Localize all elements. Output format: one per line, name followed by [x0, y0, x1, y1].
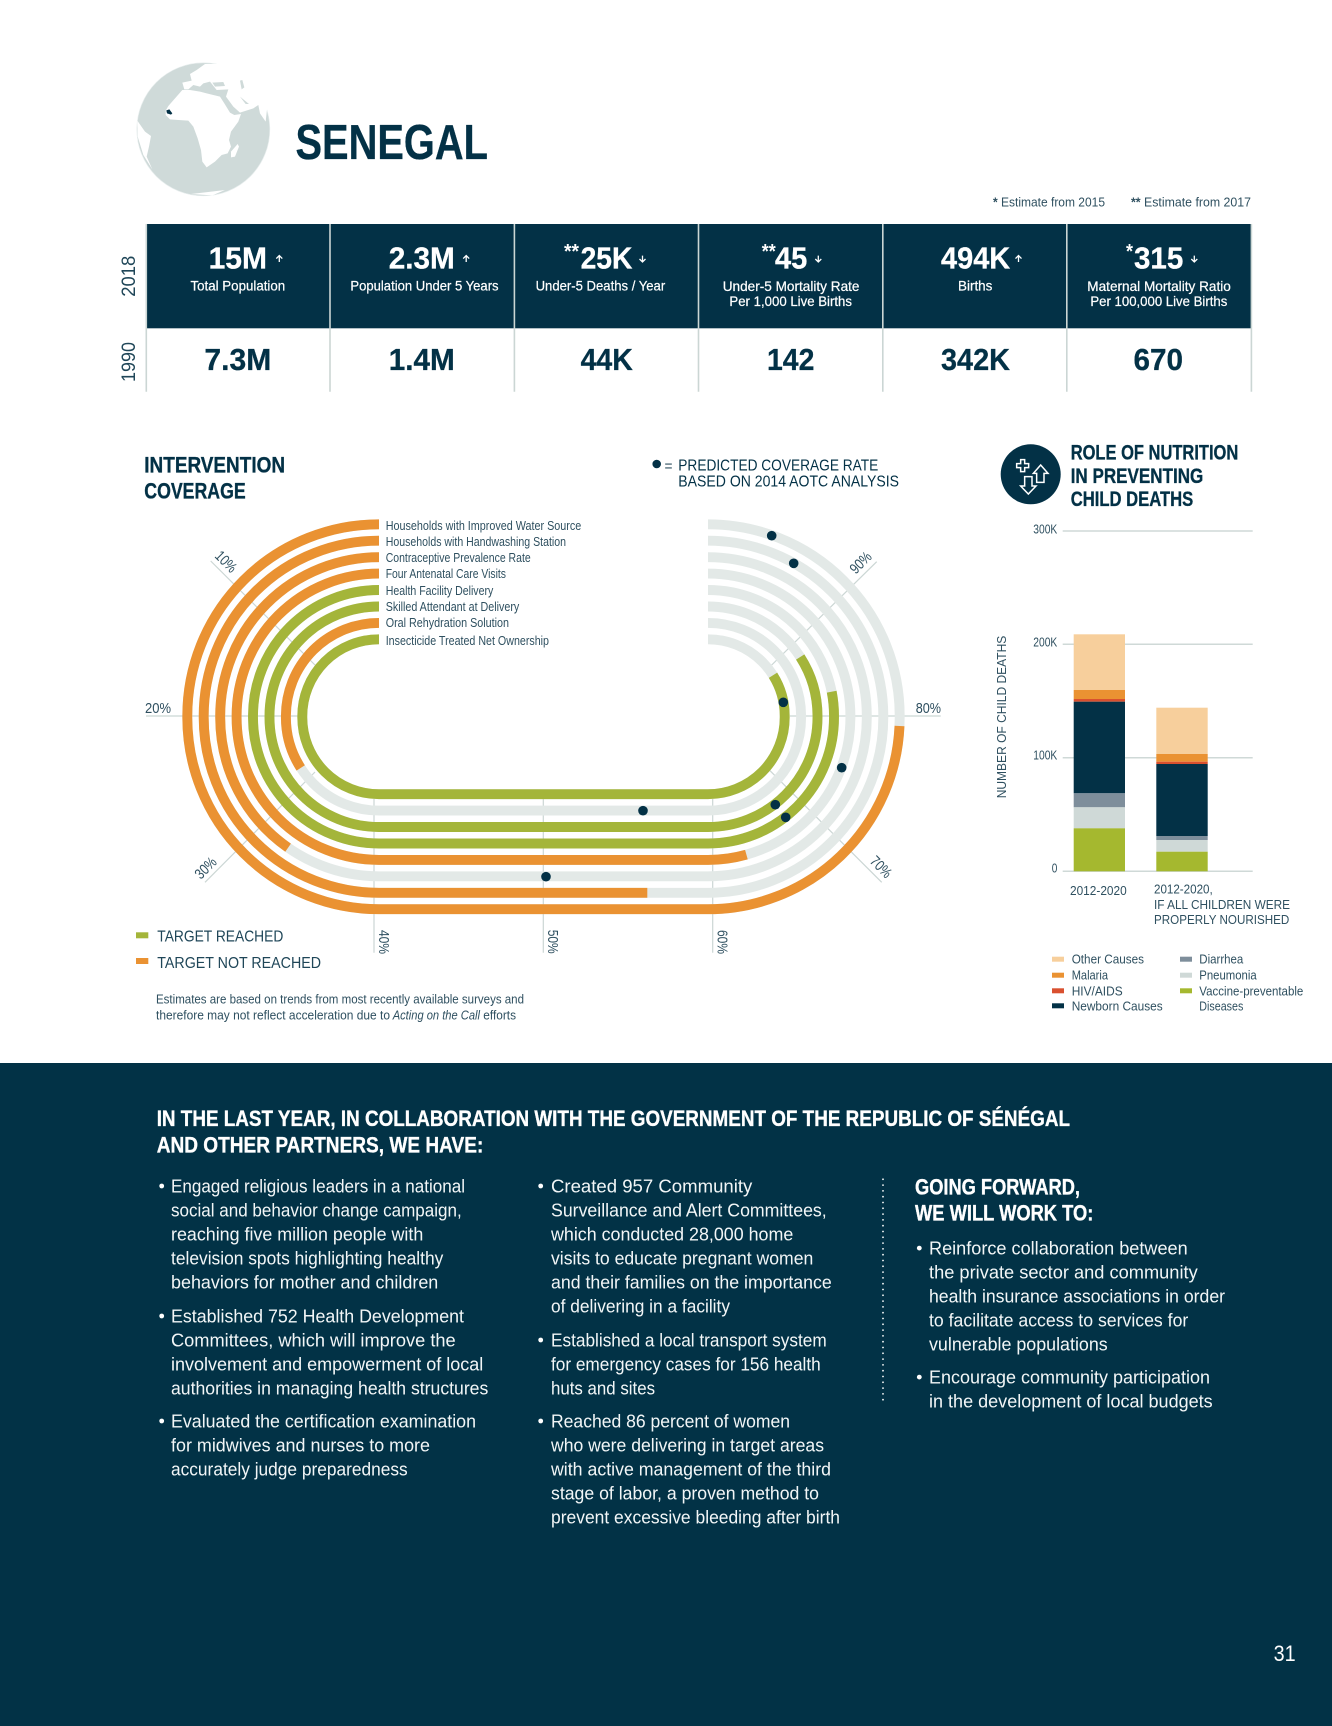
track: improved water source	[187, 524, 900, 909]
methodology note: Acting on the Call	[392, 1008, 481, 1022]
track: insecticide treated nets	[302, 639, 785, 794]
percent axis labels: 10%	[211, 548, 240, 577]
track: oral rehydration	[286, 623, 379, 768]
y axis labels: 100K	[1033, 748, 1058, 762]
stat: total population	[190, 242, 285, 377]
y axis labels: 300K	[1033, 522, 1058, 536]
stat: population under 5	[350, 242, 499, 377]
column 2 bullets	[538, 1176, 840, 1528]
column 3 bullets	[917, 1238, 1225, 1412]
panel: activities footer	[0, 1063, 1332, 1726]
legend: predicted coverage rate	[652, 458, 899, 491]
estimate footnotes: * Estimate from 2015	[993, 195, 1105, 210]
stat: maternal mortality ratio: Per 100,000 Live Births	[1090, 293, 1227, 309]
stat: population under 5: 2.3M	[389, 242, 455, 276]
panel: statistics table	[118, 224, 1251, 392]
estimate footnotes	[993, 195, 1251, 210]
stat: population under 5: Population Under 5 Years	[350, 278, 499, 294]
x axis labels: 2012-2020	[1070, 883, 1127, 898]
column 1 bullets	[159, 1176, 488, 1480]
legend: causes of death: Malaria	[1072, 968, 1108, 982]
track: skilled attendant	[270, 606, 818, 827]
methodology note: efforts	[483, 1008, 516, 1022]
legend: predicted coverage rate: BASED ON 2014 AOTC ANALYSIS	[678, 474, 899, 491]
x axis labels: PROPERLY NOURISHED	[1154, 912, 1289, 927]
column 1 bullets: Committees, which will improve the	[171, 1330, 456, 1351]
bar: if properly nourished	[1156, 708, 1208, 871]
stat: total population: 15M	[209, 242, 267, 276]
column 3 bullets: the private sector and community	[929, 1262, 1198, 1283]
stat: under-5 mortality rate: 142	[767, 343, 814, 377]
stat: births: 494K	[941, 242, 1010, 276]
column 1 bullets: accurately judge preparedness	[171, 1459, 408, 1480]
stat: under-5 mortality rate: Under-5 Mortality Rate	[723, 278, 860, 294]
legend: target reached / not reached: TARGET NOT REACHED	[157, 955, 321, 972]
column 3 bullets: to facilitate access to services for	[929, 1310, 1188, 1331]
column 2 bullets: which conducted 28,000 home	[550, 1224, 793, 1245]
heading: last year activities: AND OTHER PARTNERS, WE HAVE:	[157, 1133, 483, 1158]
percent axis labels: 80%	[916, 700, 941, 717]
track labels: Insecticide Treated Net Ownership	[386, 634, 549, 648]
column 1 bullets: for midwives and nurses to more	[171, 1435, 430, 1456]
column 1 bullets: Established 752 Health Development	[171, 1306, 464, 1327]
legend: target reached / not reached	[136, 929, 321, 972]
heading: going forward: WE WILL WORK TO:	[915, 1201, 1093, 1226]
stat: total population: 7.3M	[204, 343, 271, 377]
heading: role of nutrition: IN PREVENTING	[1071, 464, 1203, 488]
stat: under-5 deaths: Under-5 Deaths / Year	[536, 278, 666, 294]
column 3 bullets: vulnerable populations	[929, 1334, 1108, 1355]
column 2 bullets: and their families on the importance	[551, 1272, 832, 1293]
column 2 bullets: of delivering in a facility	[551, 1296, 731, 1317]
estimate footnotes: ** Estimate from 2017	[1131, 195, 1251, 210]
stat: under-5 mortality rate: 45	[775, 242, 807, 276]
track labels: Households with Handwashing Station	[386, 535, 566, 549]
stat: births	[941, 242, 1022, 377]
heading: intervention coverage: COVERAGE	[144, 479, 246, 504]
heading: last year activities: IN THE LAST YEAR, IN COLLABORATION WITH THE GOVERNMENT OF THE REPUBLIC OF SÉNÉGAL	[157, 1106, 1070, 1131]
heading: going forward: GOING FORWARD,	[915, 1174, 1080, 1199]
column 1 bullets: authorities in managing health structures	[171, 1378, 488, 1399]
stat: maternal mortality ratio: *	[1126, 241, 1133, 263]
track labels: Skilled Attendant at Delivery	[386, 600, 520, 614]
bar: 2012-2020	[1074, 634, 1125, 871]
legend: causes of death: Pneumonia	[1199, 968, 1257, 982]
icon: globe highlighting Senegal	[137, 63, 270, 196]
legend: causes of death: Other Causes	[1072, 952, 1144, 966]
track labels: Households with Improved Water Source	[386, 519, 581, 533]
page number: 31	[1274, 1641, 1296, 1666]
track labels: Oral Rehydration Solution	[386, 616, 509, 630]
stat: under-5 mortality rate	[723, 241, 860, 377]
legend: causes of death: Vaccine-preventable	[1199, 984, 1303, 998]
legend: causes of death: Diseases	[1199, 999, 1243, 1013]
heading: role of nutrition	[1071, 440, 1238, 511]
x axis labels: IF ALL CHILDREN WERE	[1154, 897, 1290, 912]
stat: population under 5: 1.4M	[389, 343, 455, 377]
x axis labels: 2012-2020,	[1154, 881, 1213, 896]
track: four antenatal visits	[237, 574, 746, 860]
stat: births: 342K	[941, 343, 1010, 377]
stat: maternal mortality ratio: 670	[1134, 343, 1183, 377]
stat: under-5 deaths	[536, 241, 666, 377]
column 1 bullets: involvement and empowerment of local	[171, 1354, 483, 1375]
percent axis labels: 30%	[192, 854, 221, 883]
column 3 bullets: health insurance associations in order	[929, 1286, 1225, 1307]
percent axis labels: 90%	[847, 549, 876, 578]
heading: going forward	[915, 1174, 1093, 1226]
percent axis labels	[145, 548, 941, 954]
year label 2018: 2018	[118, 256, 140, 297]
heading: intervention coverage: INTERVENTION	[144, 453, 285, 478]
column 1 bullets: television spots highlighting healthy	[171, 1248, 444, 1269]
track backgrounds	[187, 524, 900, 909]
stat: under-5 mortality rate: **	[762, 241, 776, 263]
heading: role of nutrition: CHILD DEATHS	[1071, 487, 1193, 511]
column 3 bullets: Reinforce collaboration between	[929, 1238, 1188, 1259]
chart: intervention coverage radial tracks	[145, 519, 941, 954]
percent axis labels: 50%	[544, 930, 561, 954]
heading: role of nutrition: ROLE OF NUTRITION	[1071, 440, 1238, 464]
y axis title: NUMBER OF CHILD DEATHS	[994, 635, 1009, 798]
stat: births: Births	[958, 278, 992, 294]
percent axis labels: 60%	[714, 930, 731, 954]
icon: nutrition arrows	[1001, 444, 1061, 504]
column 1 bullets: Engaged religious leaders in a national	[171, 1176, 465, 1197]
column 2 bullets: for emergency cases for 156 health	[551, 1354, 821, 1375]
dotted column divider	[882, 1179, 884, 1405]
column 2 bullets: with active management of the third	[550, 1459, 831, 1480]
column 3 bullets: Encourage community participation	[929, 1367, 1210, 1388]
column 1 bullets: social and behavior change campaign,	[171, 1200, 462, 1221]
x axis labels	[1070, 881, 1290, 927]
heading: last year activities	[157, 1106, 1070, 1158]
track labels: Four Antenatal Care Visits	[386, 567, 506, 581]
legend: causes of death: Newborn Causes	[1072, 999, 1163, 1013]
column 1 bullets: Evaluated the certification examination	[171, 1411, 476, 1432]
predicted coverage dots	[541, 531, 846, 882]
title: SENEGAL	[296, 116, 488, 170]
column 2 bullets: stage of labor, a proven method to	[551, 1483, 819, 1504]
legend: causes of death: HIV/AIDS	[1072, 984, 1123, 998]
stat: total population: Total Population	[190, 278, 285, 294]
percent axis labels: 20%	[145, 700, 171, 717]
column 1 bullets: behaviors for mother and children	[171, 1272, 438, 1293]
stat: under-5 mortality rate: Per 1,000 Live Births	[729, 293, 852, 309]
stat: maternal mortality ratio: Maternal Mortality Ratio	[1087, 278, 1231, 294]
column 1 bullets: reaching five million people with	[171, 1224, 423, 1245]
legend: predicted coverage rate: =	[664, 458, 673, 475]
column 2 bullets: Established a local transport system	[551, 1330, 827, 1351]
track labels: Health Facility Delivery	[386, 584, 494, 598]
column 2 bullets: Reached 86 percent of women	[551, 1411, 790, 1432]
methodology note: therefore may not reflect acceleration due to	[156, 1008, 390, 1022]
column 2 bullets: huts and sites	[551, 1378, 655, 1399]
stat: under-5 deaths: **	[564, 241, 579, 263]
stat: maternal mortality ratio: 315	[1134, 242, 1183, 276]
stat: maternal mortality ratio	[1087, 241, 1231, 377]
track labels	[386, 519, 581, 648]
column 2 bullets: prevent excessive bleeding after birth	[551, 1507, 840, 1528]
legend: target reached / not reached: TARGET REACHED	[157, 929, 283, 946]
chart: child deaths stacked bars	[994, 522, 1290, 927]
column 2 bullets: who were delivering in target areas	[550, 1435, 824, 1456]
year label 1990: 1990	[118, 342, 140, 382]
methodology note: Estimates are based on trends from most recently available surveys and	[156, 992, 524, 1006]
y axis labels: 200K	[1033, 635, 1058, 649]
track: contraceptive prevalence	[220, 557, 379, 848]
heading: intervention coverage	[144, 453, 285, 504]
column 2 bullets: Created 957 Community	[551, 1176, 753, 1197]
column 3 bullets: in the development of local budgets	[929, 1391, 1213, 1412]
track: handwashing station	[204, 541, 647, 893]
methodology note	[156, 992, 524, 1022]
stat: under-5 deaths: 25K	[581, 242, 632, 276]
legend: predicted coverage rate: PREDICTED COVERAGE RATE	[678, 458, 878, 475]
track: health facility delivery	[253, 590, 834, 844]
y axis labels: 0	[1052, 862, 1057, 876]
track labels: Contraceptive Prevalence Rate	[386, 551, 531, 565]
legend: causes of death: Diarrhea	[1199, 952, 1243, 966]
legend: causes of death	[1052, 952, 1303, 1013]
percent axis labels: 70%	[866, 853, 895, 882]
y axis labels	[1033, 522, 1058, 876]
column 2 bullets: visits to educate pregnant women	[551, 1248, 813, 1269]
stat: under-5 deaths: 44K	[581, 343, 633, 377]
percent axis labels: 40%	[375, 930, 392, 954]
column 2 bullets: Surveillance and Alert Committees,	[551, 1200, 827, 1221]
